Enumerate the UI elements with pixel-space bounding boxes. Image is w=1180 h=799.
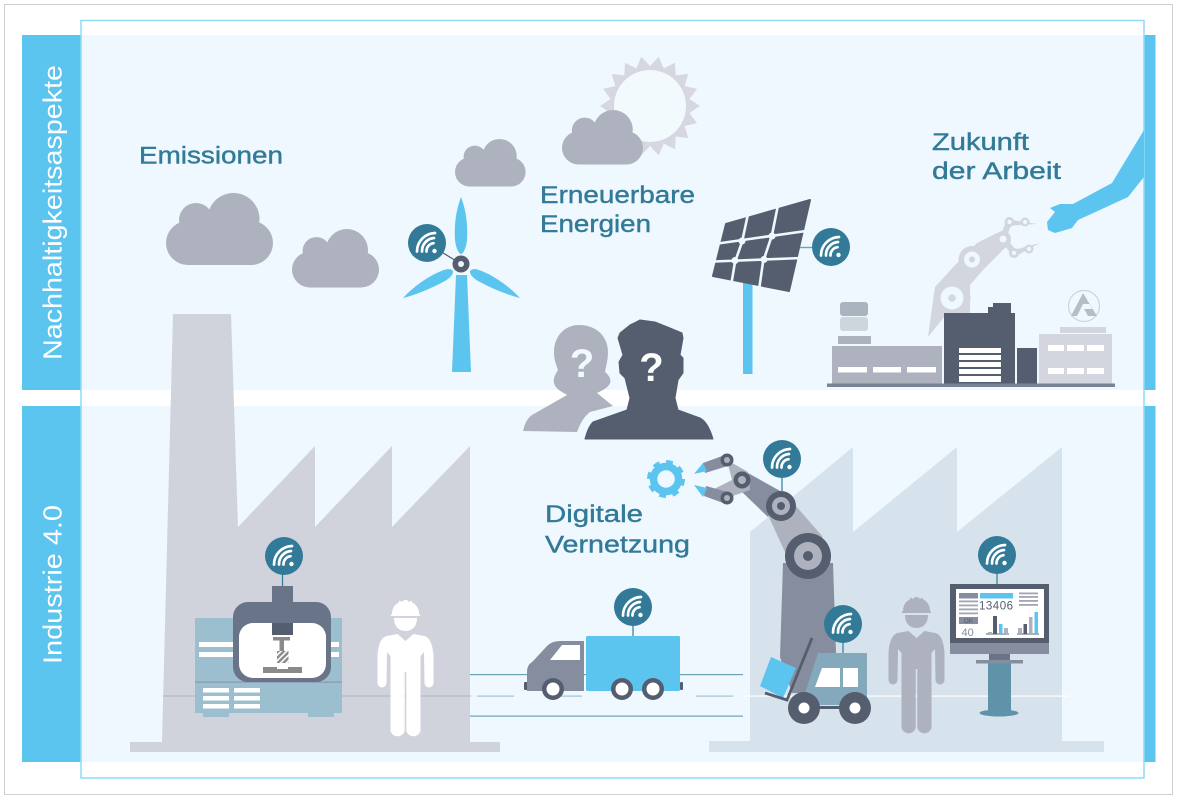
panel: Industrie 4.0 xyxy=(22,406,1156,762)
right bar bottom xyxy=(1144,406,1156,762)
cloud large xyxy=(166,193,273,265)
icon: gear xyxy=(650,462,682,496)
icon: person silhouette light xyxy=(523,325,613,432)
heading: Erneuerbare Energien: Energien xyxy=(540,211,651,238)
cloud over turbine xyxy=(455,139,526,187)
right bar top xyxy=(1144,35,1156,390)
small robot arm xyxy=(928,217,1040,337)
icon: truck xyxy=(524,588,683,700)
icon: monitor terminal: 13406 xyxy=(979,600,1013,612)
wifi badge: milling machine xyxy=(265,537,303,575)
vertical label: Industrie 4.0: Industrie 4.0 xyxy=(38,505,68,664)
left factory silhouette xyxy=(130,314,500,752)
right factory silhouette xyxy=(709,447,1104,752)
icon: sun xyxy=(600,57,700,155)
wifi badge: monitor xyxy=(978,536,1016,574)
wifi badge: robot arm xyxy=(763,440,801,478)
cloud small xyxy=(292,229,379,288)
heading: Zukunft der Arbeit xyxy=(932,129,1061,185)
wifi badge: truck xyxy=(614,588,652,626)
icon: person silhouette dark xyxy=(585,320,713,439)
worker grey xyxy=(888,597,944,733)
icon: forklift xyxy=(760,605,871,724)
heading: Zukunft der Arbeit: der Arbeit xyxy=(932,158,1061,185)
wifi badge: solar panel xyxy=(812,228,850,266)
icon: agency logo xyxy=(1068,290,1100,322)
heading: Digitale Vernetzung: Digitale xyxy=(545,501,643,528)
left bar: Nachhaltigkeitsaspekte xyxy=(22,35,81,390)
icon: person silhouette light: ? xyxy=(570,342,594,386)
left bar: Industrie 4.0 xyxy=(22,406,81,762)
factory group top right xyxy=(827,302,1115,387)
human arm reaching xyxy=(1047,130,1144,233)
icon: solar panel xyxy=(713,200,850,374)
icon: wind turbine xyxy=(403,197,520,372)
vertical label: Nachhaltigkeitsaspekte: Nachhaltigkeitsaspekte xyxy=(38,65,68,360)
large robot arm xyxy=(694,440,836,693)
worker white xyxy=(378,600,434,736)
icon: monitor terminal xyxy=(950,536,1049,716)
icon: person silhouette dark: ? xyxy=(639,346,664,390)
icon: monitor terminal: OK xyxy=(964,618,974,625)
heading: Digitale Vernetzung xyxy=(545,501,690,558)
wifi badge: turbine xyxy=(408,224,446,262)
heading: Erneuerbare Energien: Erneuerbare xyxy=(540,182,695,209)
wifi badge: forklift xyxy=(824,605,862,643)
panel: Nachhaltigkeitsaspekte xyxy=(22,35,1156,390)
icon: milling machine xyxy=(195,537,342,717)
icon: monitor terminal: 40 xyxy=(962,627,974,639)
ground and road lines xyxy=(163,674,1069,717)
cloud over sun xyxy=(562,110,643,165)
heading: Digitale Vernetzung: Vernetzung xyxy=(545,532,690,558)
heading: Zukunft der Arbeit: Zukunft xyxy=(932,129,1029,156)
heading: Erneuerbare Energien xyxy=(540,182,695,238)
heading: Emissionen: Emissionen xyxy=(139,142,283,170)
